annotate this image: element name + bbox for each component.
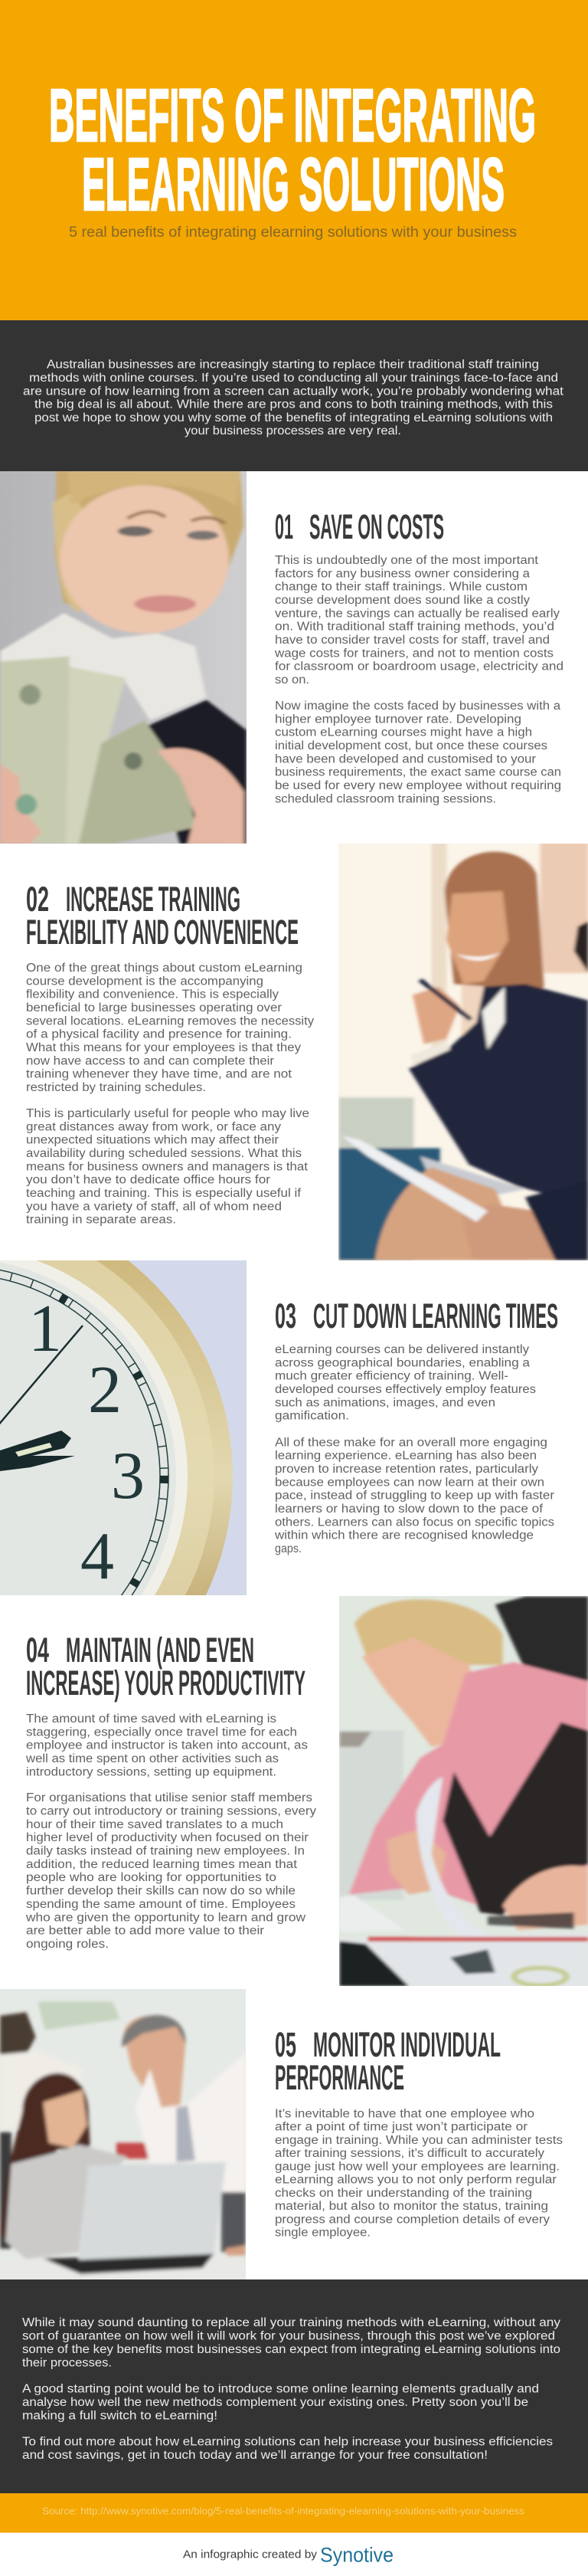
source bar: Source: http://www.synotive.com/blog/5-real-benefits-of-integrating-elearning-solutions-with-your-business <box>42 2506 524 2516</box>
body 01: business requirements, the exact same course can <box>275 766 561 779</box>
conclusion panel: analyse how well the new methods complement your existing ones. Pretty soon you’ll be <box>22 2396 528 2409</box>
intro panel: are unsure of how learning from a screen can actually work, you’re probably wondering what <box>23 385 564 398</box>
body 04: addition, the reduced learning times mean that <box>26 1858 298 1871</box>
body 02: means for business owners and managers is that <box>26 1160 309 1173</box>
body 03: pace, instead of struggling to keep up with faster <box>275 1490 554 1503</box>
conclusion panel <box>0 2279 588 2493</box>
body 01: factors for any business owner considering a <box>275 567 530 580</box>
body 03: gamification. <box>275 1410 349 1423</box>
body 03: gaps. <box>275 1542 302 1555</box>
body 02: now have access to and can complete their <box>26 1054 274 1067</box>
body 05: progress and course completion details of every <box>275 2214 550 2227</box>
heading 02 <box>26 880 299 952</box>
conclusion panel: their processes. <box>22 2357 112 2369</box>
source bar <box>0 2493 588 2533</box>
body 03: much greater efficiency of training. Well- <box>275 1370 508 1383</box>
body 04: spending the same amount of time. Employees <box>26 1898 296 1911</box>
section 04 text: INCREASE) YOUR PRODUCTIVITY <box>26 1663 305 1703</box>
section 03 text <box>274 1296 558 1555</box>
body 04: ongoing roles. <box>26 1938 109 1951</box>
body 03: developed courses effectively employ features <box>275 1383 536 1396</box>
section 01 text: SAVE ON COSTS <box>309 507 444 546</box>
body 04: well as time spent on other activities such as <box>25 1752 279 1765</box>
heading 04 <box>26 1630 305 1703</box>
photo: woman reading paperwork <box>339 1596 588 1986</box>
body 04: who are given the opportunity to learn and grow <box>25 1911 306 1924</box>
photo: clock: 3 <box>111 1439 145 1513</box>
body 04: daily tasks instead of training new employees. In <box>26 1845 305 1858</box>
body 05: after a point of time just won’t participate or <box>275 2121 528 2133</box>
body 04: further develop their skills can now do so while <box>26 1885 296 1898</box>
body 01: custom eLearning courses might have a high <box>275 726 532 739</box>
body 02: teaching and training. This is especially useful if <box>26 1187 302 1200</box>
body 04 <box>25 1712 316 1951</box>
footer credit <box>183 2544 394 2567</box>
body 02: of a physical facility and presence for training. <box>26 1028 292 1041</box>
body 02: availability during scheduled sessions. What this <box>26 1147 302 1160</box>
body 04: employee and instructor is taken into account, as <box>26 1739 308 1752</box>
body 01: have to consider travel costs for staff, travel and <box>275 634 550 647</box>
body 01: on. With traditional staff training methods, you’d <box>275 621 554 634</box>
body 05: eLearning allows you to not only perform regular <box>275 2173 557 2187</box>
body 04: higher level of productivity when focused on their <box>26 1831 309 1844</box>
section 04 text <box>25 1630 316 1951</box>
intro panel: the big deal is all about. While there are pros and cons to both training methods, with this <box>34 398 553 411</box>
body 04: staggering, especially once travel time for each <box>26 1726 297 1739</box>
body 05: checks on their understanding of the training <box>275 2187 532 2200</box>
intro panel: methods with online courses. If you’re used to conducting all your trainings face-to-face and <box>29 372 558 385</box>
photo: man and woman at laptop <box>0 1989 246 2279</box>
body 03: because employees can now learn at their own <box>275 1476 544 1489</box>
body 04: hour of their time saved translates to a much <box>26 1818 283 1831</box>
conclusion panel: A good starting point would be to introduce some online learning elements gradually and <box>22 2383 539 2396</box>
body 03: learning experience. eLearning has also been <box>275 1450 537 1463</box>
body 04: For organisations that utilise senior staff members <box>26 1791 312 1804</box>
body 02: This is particularly useful for people who may live <box>26 1107 309 1120</box>
intro panel <box>0 320 588 471</box>
heading 05 <box>275 2025 501 2097</box>
conclusion panel: To find out more about how eLearning solutions can help increase your business efficiencies <box>22 2436 553 2449</box>
header banner <box>0 0 588 320</box>
logo: Synotive: Synotive <box>320 2544 394 2567</box>
body 01: scheduled classroom training sessions. <box>275 792 496 805</box>
heading 03: 03 <box>275 1296 296 1336</box>
body 01: Now imagine the costs faced by businesses with a <box>275 700 560 713</box>
body 05: It’s inevitable to have that one employee who <box>275 2107 534 2120</box>
body 03: All of these make for an overall more engaging <box>275 1436 547 1449</box>
conclusion panel: making a full switch to eLearning! <box>22 2410 217 2423</box>
body 03: such as animations, images, and even <box>275 1396 495 1409</box>
body 01: for classroom or boardroom usage, electricity and <box>275 660 564 673</box>
conclusion panel: sort of guarantee on how well it will work for your business, through this post we’ve explored <box>22 2329 555 2343</box>
body 01: have been developed and customised to your <box>275 752 536 765</box>
body 05: gauge just how well your employees are learning. <box>275 2161 560 2173</box>
heading 05: 05 <box>275 2025 296 2064</box>
body 03: within which there are recognised knowledge <box>274 1529 534 1542</box>
body 04: The amount of time saved with eLearning is <box>26 1712 276 1726</box>
conclusion panel: and cost savings, get in touch today and we’ll arrange for your free consultation! <box>22 2449 488 2462</box>
intro panel: post we hope to show you why some of the benefits of integrating eLearning solutions with <box>34 411 553 424</box>
section 02 text: FLEXIBILITY AND CONVENIENCE <box>26 913 299 952</box>
body 04: people who are looking for opportunities to <box>26 1871 276 1884</box>
body 03: others. Learners can also focus on specific topics <box>275 1516 554 1529</box>
photo: businesswoman with pen <box>338 842 588 1262</box>
heading 01 <box>275 507 444 546</box>
body 02: training in separate areas. <box>26 1214 176 1227</box>
body 02 <box>26 962 314 1227</box>
heading 04: 04 <box>26 1630 49 1670</box>
title <box>49 74 536 226</box>
heading 01: 01 <box>275 507 293 546</box>
body 01: initial development cost, but once these courses <box>275 739 547 752</box>
body 04: introductory sessions, setting up equipment. <box>26 1765 276 1778</box>
body 05: after training sessions, it’s difficult to accurately <box>275 2147 544 2160</box>
heading 02: 02 <box>26 880 49 919</box>
body 01: This is undoubtedly one of the most important <box>275 554 539 567</box>
body 02: you have a variety of staff, all of whom need <box>26 1200 282 1213</box>
body 01 <box>274 554 564 805</box>
body 05: material, but also to monitor the status, training <box>275 2200 548 2213</box>
body 01: course development does sound like a costly <box>275 594 530 607</box>
body 05 <box>275 2107 563 2240</box>
body 02: restricted by training schedules. <box>26 1081 206 1094</box>
body 03: proven to increase retention rates, particularly <box>275 1463 538 1476</box>
subtitle: 5 real benefits of integrating elearning solutions with your business <box>69 224 517 241</box>
body 04: are better able to add more value to their <box>26 1925 264 1938</box>
body 01: venture, the savings can actually be realised early <box>275 607 560 620</box>
body 02: beneficial to large businesses operating over <box>26 1001 282 1014</box>
section 02 text <box>26 880 314 1227</box>
body 05: single employee. <box>275 2227 371 2240</box>
photo: clock: 1 <box>28 1292 62 1366</box>
body 01: wage costs for trainers, and not to mention costs <box>274 647 554 660</box>
section 05 text <box>275 2025 563 2240</box>
photo: woman holding money <box>0 470 247 844</box>
body 02: you don’t have to dedicate office hours for <box>26 1174 270 1187</box>
body 02: What this means for your employees is that they <box>26 1041 301 1054</box>
section 01 text <box>274 507 564 805</box>
body 05: engage in training. While you can administer tests <box>275 2134 563 2147</box>
heading 02: INCREASE TRAINING <box>66 880 240 919</box>
body 02: great distances away from work, or face any <box>26 1120 281 1133</box>
body 02: flexibility and convenience. This is especially <box>26 988 279 1001</box>
body 03: learners or having to slow down to the pace of <box>275 1503 544 1516</box>
body 01: change to their staff trainings. While custom <box>275 581 528 594</box>
body 01: be used for every new employee without requiring <box>275 779 561 792</box>
photo: clock: 2 <box>88 1353 122 1427</box>
intro panel: your business processes are very real. <box>185 424 401 438</box>
photo: clock <box>0 1260 247 1595</box>
body 02: several locations. eLearning removes the necessity <box>26 1014 314 1027</box>
body 02: course development is the accompanying <box>26 975 263 988</box>
conclusion panel: some of the key benefits most businesses can expect from integrating eLearning solutions into <box>22 2343 560 2356</box>
body 03: eLearning courses can be delivered instantly <box>275 1343 529 1356</box>
footer credit: An infographic created by <box>183 2549 318 2561</box>
body 02: training whenever they have time, and are not <box>26 1068 292 1081</box>
body 02: One of the great things about custom eLearning <box>26 962 302 975</box>
photo: clock: 4 <box>80 1519 114 1594</box>
heading 05: PERFORMANCE <box>275 2058 404 2097</box>
conclusion panel: While it may sound daunting to replace all your training methods with eLearning, without any <box>22 2316 560 2329</box>
body 01: so on. <box>275 673 309 687</box>
body 03 <box>274 1343 554 1555</box>
body 02: unexpected situations which may affect their <box>26 1134 279 1147</box>
heading 04: MAINTAIN (AND EVEN <box>66 1630 254 1670</box>
body 04: to carry out introductory or training sessions, every <box>26 1804 316 1817</box>
intro panel: Australian businesses are increasingly starting to replace their traditional staff training <box>47 359 539 372</box>
body 01: higher employee turnover rate. Developing <box>275 713 521 726</box>
body 03: across geographical boundaries, enabling a <box>275 1356 530 1369</box>
